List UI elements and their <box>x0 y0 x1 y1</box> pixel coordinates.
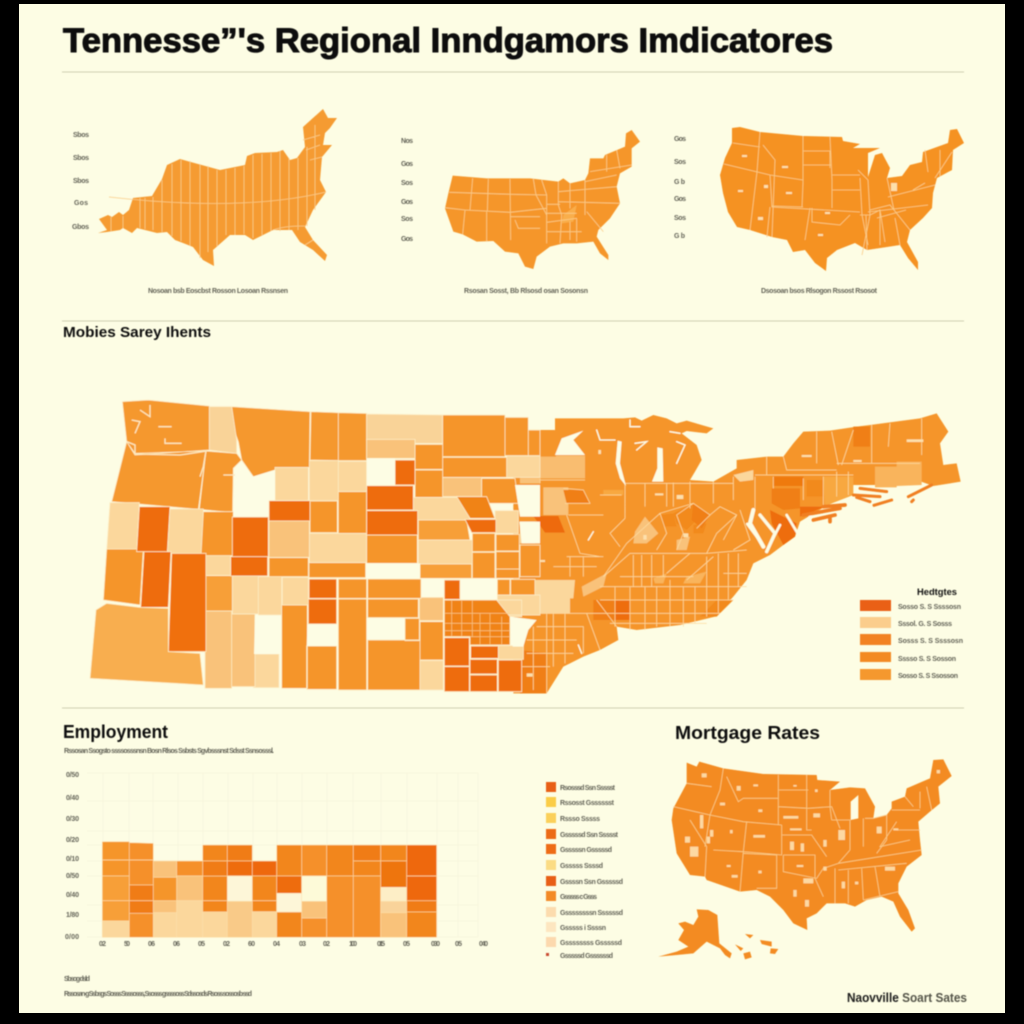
panel: map one <box>72 109 337 295</box>
chart gridlines <box>87 773 478 937</box>
chart y axis labels: 0/50 <box>66 772 79 779</box>
chart y axis labels: 0/10 <box>66 856 79 863</box>
legend labels: Sosss S. S Ssssosn <box>898 638 963 645</box>
chart x axis labels: 50 <box>124 941 130 948</box>
map one axis labels <box>72 132 89 231</box>
tall orange block <box>168 553 206 652</box>
heading: mortgage rates: Mortgage Rates <box>675 723 820 743</box>
eastern silhouette <box>513 413 961 693</box>
column 5 <box>203 845 227 937</box>
arizona block <box>90 603 203 685</box>
legend labels: Gssssssssn Ssssssd <box>560 910 623 917</box>
map three white marks <box>738 155 897 236</box>
small county grid <box>444 600 510 645</box>
legend labels: Rsosssd Ssn Ssssst <box>560 785 616 792</box>
column 8 <box>277 845 302 937</box>
chart x axis labels: 015 <box>377 941 385 948</box>
chart x axis labels: 05 <box>455 941 462 948</box>
map two axis labels: Sos <box>401 180 413 187</box>
map two state lines <box>445 150 632 243</box>
legend labels <box>898 604 963 680</box>
legend labels: Gsssssd Ssn Ssssst <box>560 832 619 839</box>
map three axis labels: Gb <box>674 233 685 240</box>
map one axis labels: Sbos <box>73 155 89 162</box>
chart x axis labels: 02 <box>99 941 106 948</box>
map three axis labels: Sos <box>674 159 686 166</box>
legend labels: Rssso Sssss <box>560 816 600 823</box>
main map eastern region <box>513 413 961 693</box>
alaska <box>658 909 732 958</box>
mortgage map state lines <box>673 768 932 903</box>
white gaps <box>233 458 540 654</box>
legend labels: Gsssssn Gsssssd <box>560 847 612 854</box>
panel: map three <box>674 127 964 295</box>
pacific northwest states <box>112 400 367 513</box>
map one axis labels: Gbos <box>72 224 89 231</box>
legend swatch 4 <box>860 652 891 662</box>
map three shape <box>720 127 964 271</box>
cell grid: mid orange blocks <box>103 415 540 690</box>
mortgage map white marks <box>685 770 940 907</box>
panel: employment <box>63 722 488 998</box>
map three axis labels: Gos <box>674 196 686 203</box>
legend labels: Gsssssd Gssssssd <box>560 953 613 960</box>
map three axis labels: Sos <box>674 215 686 222</box>
legend labels: Gsssss i Ssssn <box>560 925 606 932</box>
contiguous states shape <box>672 759 952 932</box>
legend labels: Sosso S. S Ssssosn <box>898 604 961 611</box>
title: Tennesse”'s Regional Inndgamors Imdicatores <box>63 22 833 60</box>
map three caption: Dsosoan bsos Rlsogon Rssost Rsosot <box>761 288 878 295</box>
map two axis labels: Nos <box>401 138 413 145</box>
chart x axis labels: 60 <box>248 941 255 948</box>
heading: main map: Mobies Sarey Ihents <box>63 324 211 341</box>
column 2 <box>129 843 153 937</box>
map one axis labels: Sbos <box>73 178 89 185</box>
legend labels <box>560 785 623 960</box>
chart x axis labels: 030 <box>431 941 440 948</box>
legend labels: Gsssss Ssssd <box>560 863 603 870</box>
chart x axis labels: 03 <box>299 941 306 948</box>
map three state lines <box>724 132 952 255</box>
chart x axis labels: 06 <box>148 941 155 948</box>
column 12 <box>381 845 407 937</box>
column 13 <box>407 845 437 937</box>
main map legend <box>860 587 963 680</box>
legend labels: Sssol. G. S Sosss <box>898 621 952 628</box>
map one grid lines <box>109 125 326 258</box>
chart y axis labels: 0/40 <box>66 892 79 899</box>
cell grid: deep orange blocks <box>137 460 522 692</box>
hawaii <box>735 934 778 959</box>
map three axis labels: Gos <box>674 136 686 143</box>
legend swatch 1 <box>860 600 891 611</box>
chart x axis labels <box>99 941 488 948</box>
column 9 <box>302 845 327 937</box>
panel: map two <box>401 130 640 295</box>
chart x axis labels: 02 <box>223 941 230 948</box>
main map western region <box>90 400 540 692</box>
map one axis labels: Sbos <box>73 132 89 139</box>
map one caption: Nosoan bsb Eoscbst Rosson Losoan Rssnsen <box>148 288 288 295</box>
chart x axis labels: 05 <box>198 941 205 948</box>
chart y axis labels: 1/80 <box>66 912 79 919</box>
map three axis labels <box>674 136 686 240</box>
chart y axis labels: 0/30 <box>66 816 79 823</box>
panel: mortgage map <box>658 759 952 959</box>
column 1 <box>102 842 129 937</box>
cell grid: tinted blocks <box>205 520 472 611</box>
legend labels: Gsssss c Gsss <box>560 894 597 901</box>
panel: chart legend <box>546 782 623 960</box>
chart x axis labels: 06 <box>173 941 180 948</box>
coastal islands <box>803 485 932 522</box>
legend heading: Hedtgtes <box>917 587 957 597</box>
map two axis labels: Gos <box>401 199 413 206</box>
map two highlight <box>562 205 577 223</box>
legend swatch 3 <box>860 634 891 645</box>
eastern water cutouts <box>578 420 810 653</box>
heat chart cells <box>102 842 437 937</box>
map two shape <box>445 130 640 269</box>
chart x axis labels: 02 <box>323 941 330 948</box>
legend swatch 2 <box>860 617 891 628</box>
chart y axis labels: 0/50 <box>66 873 79 880</box>
column 10 <box>327 845 353 937</box>
source label: Sbsog dsld <box>64 976 90 983</box>
chart y axis labels <box>65 772 79 941</box>
map two axis labels: Gos <box>401 161 413 168</box>
legend labels: Sosso S. S Ssosson <box>898 673 958 680</box>
legend labels: Rssosst Gsssssst <box>560 800 615 807</box>
map two caption: Rsosan Sosst, Bb Rlsosd osan Sosonsn <box>464 288 588 295</box>
chart y axis labels: 0/00 <box>65 934 79 941</box>
column 11 <box>353 845 381 937</box>
chart x axis labels: 100 <box>349 941 357 948</box>
map two axis labels: Gos <box>401 236 413 243</box>
employment heading: Employment <box>63 722 168 742</box>
eastern cell tints <box>520 427 922 693</box>
darker county blocks <box>444 497 510 645</box>
legend swatches <box>546 782 556 956</box>
eastern white marks <box>527 437 923 677</box>
washington water marks <box>127 405 235 477</box>
employment subtitle: Rssosan Ssogsto ssssosssnsn Bosn Rlsos Ssbsts Sgvbsssnst Sdsst Ssnsosssl. <box>64 748 274 755</box>
map one axis labels: Gos <box>74 200 88 207</box>
legend labels: Gssssn Ssn Gsssssd <box>560 879 623 886</box>
column 7 <box>252 861 277 937</box>
chart y axis labels: 0/40 <box>66 795 79 802</box>
cell grid: tan blocks <box>205 439 482 688</box>
chart x axis labels: 040 <box>479 941 488 948</box>
great lakes cutouts <box>555 431 663 486</box>
chart x axis labels: 05 <box>403 941 410 948</box>
footer credit: Naovville Soart Sates <box>847 991 967 1005</box>
cell grid: pale top blocks <box>209 407 443 453</box>
chart x axis labels: 04 <box>273 941 280 948</box>
legend labels: Gssssssss Gsssssd <box>560 940 622 947</box>
chart y axis labels: 0/20 <box>66 837 79 844</box>
map two axis labels: Sos <box>401 216 413 223</box>
panel: main map <box>90 400 963 693</box>
source note: Rssosan-g Ssbsgs Sosss Ssssosss, Ssosss gssssoss Sdssosds Rsoss sossosb ssd <box>64 991 252 998</box>
map one shape <box>98 109 337 266</box>
column 4 <box>177 861 203 937</box>
legend labels: Sssso S. S Sosson <box>898 656 956 663</box>
column 3 <box>153 861 177 937</box>
legend swatch 5 <box>860 669 891 680</box>
cell grid: pale blocks <box>107 456 540 690</box>
eastern cell lines <box>517 418 922 693</box>
map three axis labels: Gb <box>674 179 685 186</box>
column 6 <box>227 845 252 937</box>
map two axis labels <box>401 138 413 243</box>
